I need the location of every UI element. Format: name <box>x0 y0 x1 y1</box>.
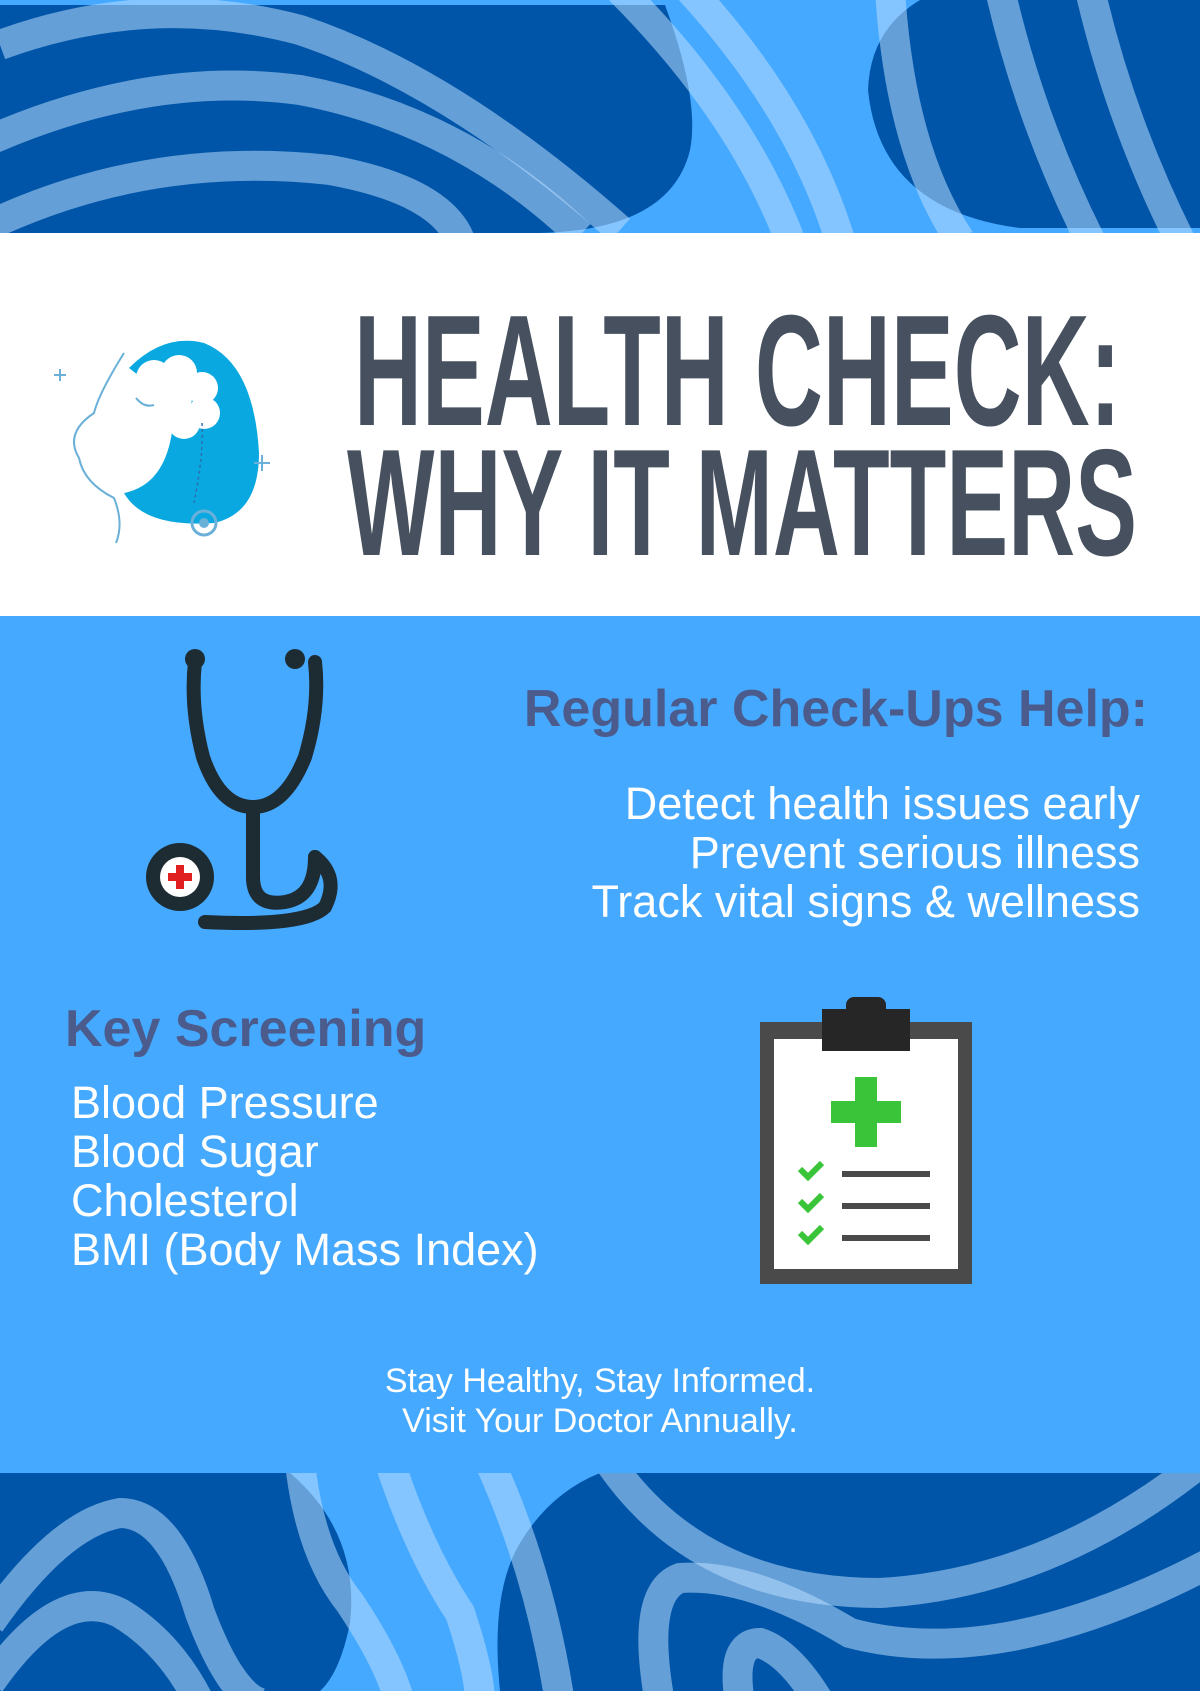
screening list <box>71 1077 539 1275</box>
benefits list <box>591 778 1140 927</box>
benefits list: Prevent serious illness <box>690 827 1140 878</box>
footer message <box>385 1362 815 1440</box>
footer message: Stay Healthy, Stay Informed. <box>385 1362 815 1400</box>
icon: clipboard <box>760 997 972 1284</box>
bottom decorative band <box>0 1473 1200 1691</box>
screening list: Blood Sugar <box>71 1126 319 1177</box>
screening list: Blood Pressure <box>71 1077 379 1128</box>
screening list: Cholesterol <box>71 1175 299 1226</box>
benefits list: Detect health issues early <box>625 778 1140 829</box>
icon: stethoscope <box>146 649 338 930</box>
benefits list: Track vital signs & wellness <box>591 876 1140 927</box>
top decorative band <box>0 0 1200 233</box>
heading: regular check-ups: Regular Check-Ups Help: <box>524 680 1148 738</box>
footer message: Visit Your Doctor Annually. <box>402 1402 798 1440</box>
icon: head with brain <box>54 340 270 544</box>
title <box>347 300 1137 560</box>
main blue panel <box>0 616 1200 1474</box>
heading: key screening: Key Screening <box>65 1000 426 1058</box>
screening list: BMI (Body Mass Index) <box>71 1224 539 1275</box>
